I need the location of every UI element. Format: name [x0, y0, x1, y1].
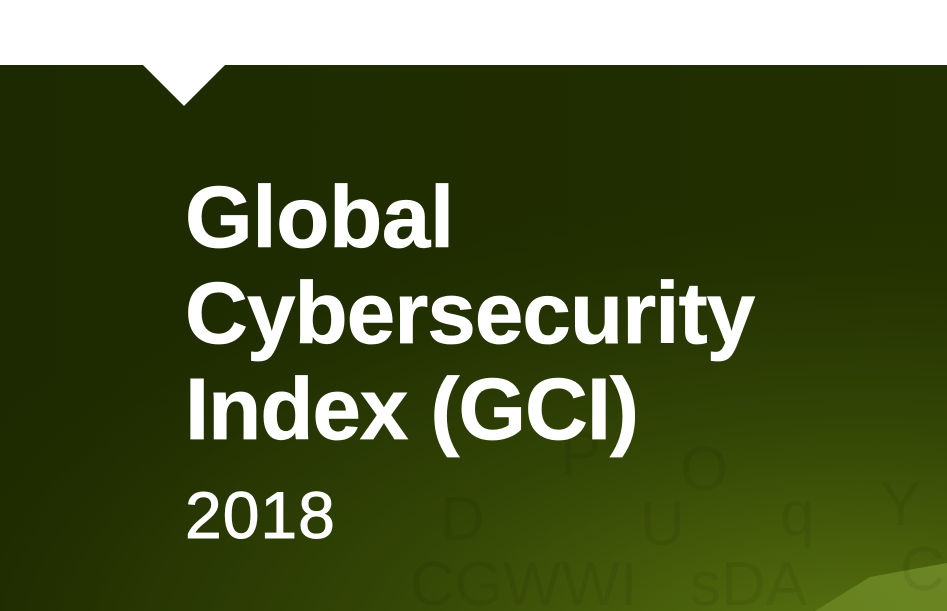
title: Global	[185, 169, 454, 266]
year: 2018	[185, 478, 336, 552]
panel: dark green background: q	[780, 480, 814, 549]
title: Cybersecurity	[185, 265, 754, 362]
panel: dark green background: P	[560, 420, 601, 489]
panel: dark green background: Y	[880, 470, 921, 539]
panel: dark green background: D	[440, 485, 485, 554]
panel: dark green background: U	[640, 490, 685, 559]
panel: dark green background: C	[900, 535, 945, 604]
panel: dark green background: O	[680, 435, 728, 504]
title	[185, 169, 756, 458]
title: Index (GCI)	[185, 361, 638, 458]
